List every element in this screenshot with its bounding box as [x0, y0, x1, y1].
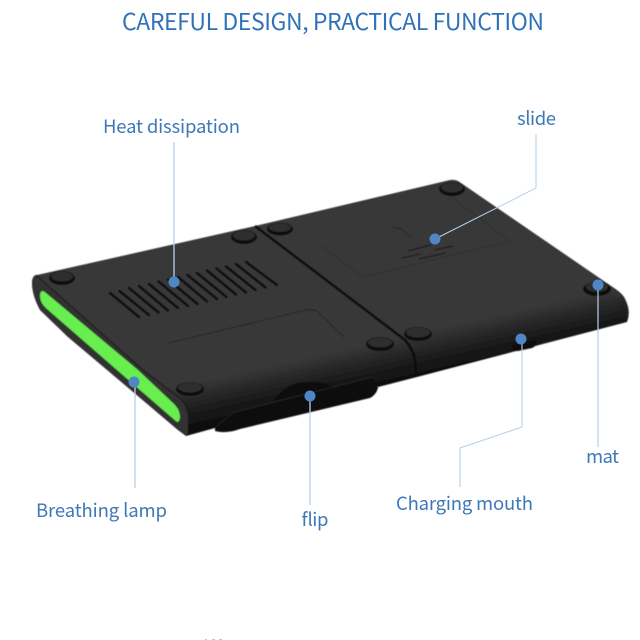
flip notch — [273, 382, 333, 401]
hinge gap — [255, 226, 416, 376]
vent slots — [110, 262, 277, 317]
callout: slide — [430, 105, 556, 244]
device body — [32, 180, 629, 436]
callout: heat dissipation — [103, 113, 240, 288]
callout: mat — [586, 280, 619, 469]
callout: breathing lamp: Breathing lamp — [36, 497, 167, 523]
callout: flip: flip — [301, 506, 328, 532]
callout: charging mouth — [396, 334, 533, 516]
callout: mat: mat — [586, 443, 619, 469]
surface edge highlight — [36, 275, 188, 414]
rubber feet — [49, 182, 611, 396]
callout: heat dissipation: Heat dissipation — [103, 113, 240, 139]
product: folded wireless charger — [32, 180, 629, 436]
breathing lamp strip — [40, 291, 180, 422]
flip stand — [215, 377, 378, 432]
charging port — [512, 340, 536, 351]
callout: slide: slide — [517, 105, 556, 131]
lamp end face — [32, 275, 188, 436]
callout: flip — [301, 390, 328, 532]
slide panel outline — [320, 187, 510, 277]
callout: breathing lamp — [36, 376, 167, 523]
callout: charging mouth: Charging mouth — [396, 490, 533, 516]
slide symbol — [393, 227, 453, 259]
recessed panel outline — [169, 310, 345, 343]
cropped marks at bottom edge — [205, 639, 222, 640]
title: CAREFUL DESIGN, PRACTICAL FUNCTION — [122, 3, 544, 37]
